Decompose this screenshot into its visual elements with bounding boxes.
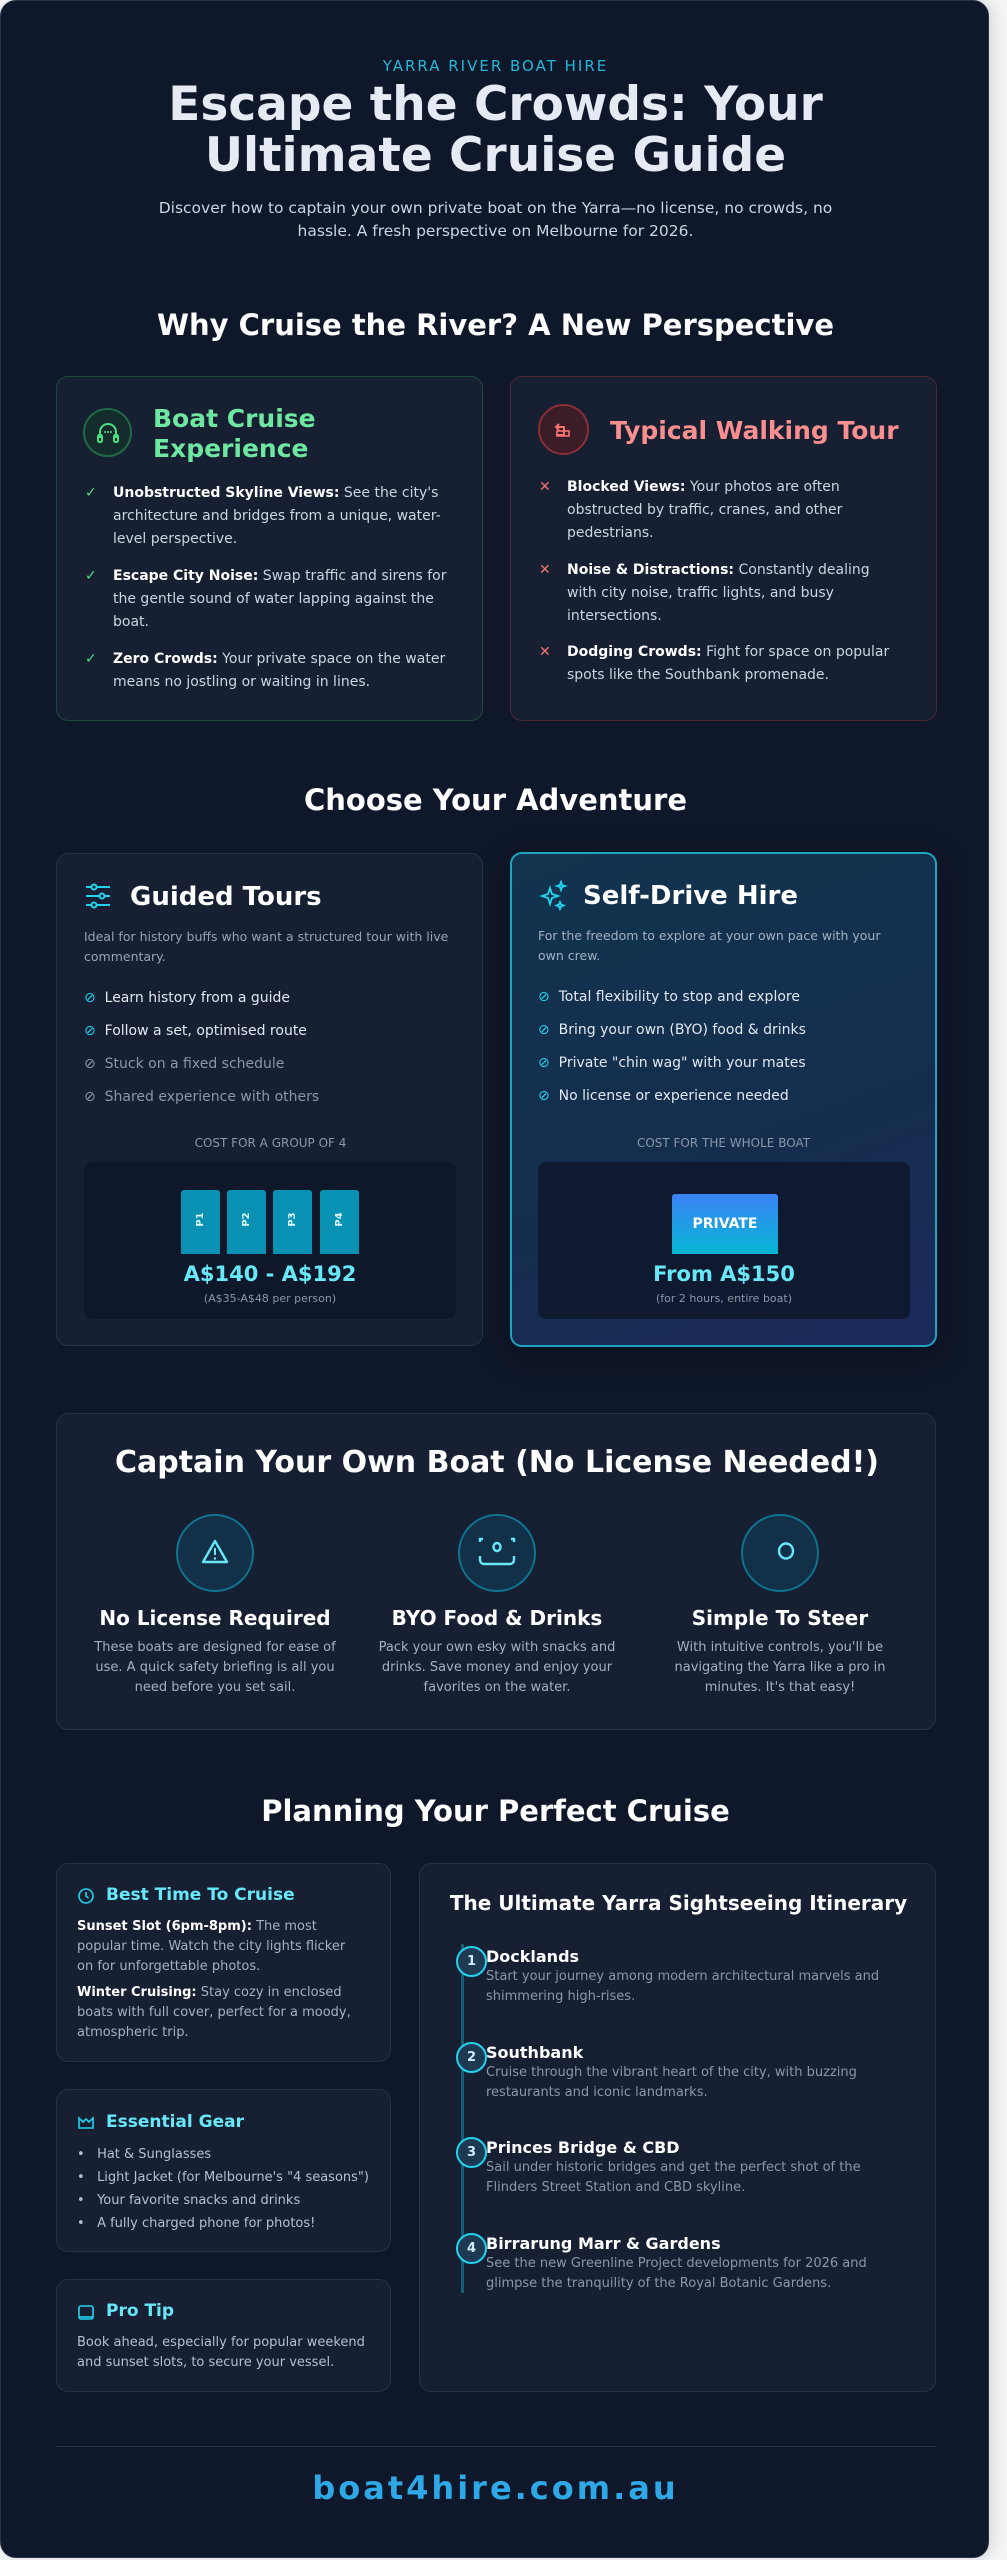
panel: captain your own boat [56, 1413, 936, 1730]
panel: pro tip: Book ahead, especially for popular weekend and sunset slots, to secure your vessel. [77, 2335, 365, 2370]
icon: warning [176, 1514, 254, 1592]
feature: no license [94, 1514, 336, 1695]
list: ✕ [539, 644, 551, 660]
icon: cooler [458, 1514, 536, 1592]
list: Blocked Views: Your photos are often obstructed by traffic, cranes, and other pedestrians. [567, 479, 842, 541]
heading: The Ultimate Yarra Sightseeing Itinerary [450, 1891, 907, 1915]
panel: essential gear [56, 2089, 391, 2252]
stop 4: Birrarung Marr & Gardens [486, 2234, 721, 2253]
people bars [181, 1190, 359, 1254]
features: ⊘ Total flexibility to stop and explore [538, 989, 800, 1005]
icon: sliders [86, 884, 110, 908]
stop 1: Start your journey among modern architectural marvels and shimmering high-rises. [486, 1969, 879, 2004]
heading: Experience [153, 434, 308, 463]
heading: Self-Drive Hire [583, 881, 798, 911]
panel: self-drive hire [510, 852, 937, 1347]
title: Escape the Crowds: Your [168, 77, 823, 132]
stop 2: Southbank [486, 2043, 583, 2062]
list: • Hat & Sunglasses [77, 2147, 211, 2162]
stop 3: Princes Bridge & CBD [486, 2138, 680, 2157]
panel: best time [56, 1863, 391, 2062]
features: ⊘ Follow a set, optimised route [84, 1023, 307, 1039]
private badge: PRIVATE [692, 1216, 758, 1232]
panel: essential gear: Essential Gear [106, 2112, 244, 2132]
stop 2: 2 [467, 2050, 476, 2065]
feature: steer [674, 1514, 885, 1695]
price box [538, 1162, 910, 1319]
panel: pro tip: Pro Tip [106, 2301, 174, 2321]
list: • Your favorite snacks and drinks [77, 2193, 300, 2208]
panel: best time: Best Time To Cruise [106, 1885, 295, 1905]
cost label: COST FOR A GROUP OF 4 [195, 1136, 346, 1150]
feature: BYO: Pack your own esky with snacks and drinks. Save money and enjoy your favorites on the water. [379, 1640, 615, 1695]
icon: clock [78, 1888, 94, 1904]
feature: no license: These boats are designed for ease of use. A quick safety briefing is all you need before you set sail. [94, 1640, 336, 1695]
cost label: COST FOR THE WHOLE BOAT [637, 1136, 810, 1150]
body: Sunset Slot (6pm-8pm): The most popular time. Watch the city lights flicker on for unforgettable photos. [77, 1919, 345, 1974]
description: For the freedom to explore at your own pace with your own crew. [538, 928, 880, 963]
subtitle: Discover how to captain your own private boat on the Yarra—no license, no crowds, no hassle. A fresh perspective on Melbourne for 2026. [159, 199, 832, 240]
list: Dodging Crowds: Fight for space on popular spots like the Southbank promenade. [567, 644, 889, 683]
stop 1 [456, 1946, 879, 2004]
stop 2: Cruise through the vibrant heart of the city, with buzzing restaurants and iconic landmarks. [486, 2065, 857, 2100]
list: ✓ [85, 485, 97, 501]
list: ✓ [85, 651, 97, 667]
list [85, 485, 446, 690]
heading: planning: Planning Your Perfect Cruise [261, 1794, 730, 1828]
list: Unobstructed Skyline Views: See the city's architecture and bridges from a unique, water-level perspective. [113, 485, 441, 547]
list: • Light Jacket (for Melbourne's "4 seasons") [77, 2170, 369, 2185]
price box: (A$35-A$48 per person) [204, 1292, 336, 1305]
features: ⊘ Bring your own (BYO) food & drinks [538, 1022, 806, 1038]
title: Ultimate Cruise Guide [205, 128, 786, 183]
heading: Captain Your Own Boat (No License Needed!) [115, 1445, 879, 1480]
people bars: P4 [334, 1212, 345, 1227]
feature: BYO: BYO Food & Drinks [392, 1606, 602, 1630]
features: ⊘ Shared experience with others [84, 1089, 319, 1105]
icon: walking [538, 404, 589, 455]
stop 4: See the new Greenline Project developments for 2026 and glimpse the tranquility of the Royal Botanic Gardens. [486, 2256, 867, 2291]
heading [153, 404, 316, 463]
stop 3: 3 [467, 2145, 476, 2160]
list: Zero Crowds: Your private space on the water means no jostling or waiting in lines. [113, 651, 445, 690]
feature: steer: With intuitive controls, you'll be navigating the Yarra like a pro in minutes. It's that easy! [674, 1640, 885, 1695]
feature: BYO [379, 1514, 615, 1695]
panel: boat cruise experience [56, 376, 483, 721]
list [77, 2147, 369, 2231]
panel: best time: Winter Cruising: Stay cozy in enclosed boats with full cover, perfect for a moody, atmospheric trip. [77, 1985, 351, 2040]
panel: itinerary [419, 1863, 936, 2392]
list: • A fully charged phone for photos! [77, 2216, 315, 2231]
icon: sparkles [539, 880, 568, 912]
stop 3 [456, 2137, 861, 2195]
list: Noise & Distractions: Constantly dealing with city noise, traffic lights, and busy intersections. [567, 562, 870, 624]
stop 4 [456, 2233, 867, 2291]
people bars: P2 [241, 1212, 252, 1227]
panel: pro tip [56, 2279, 391, 2392]
people bars: P1 [195, 1212, 206, 1227]
stop 1: 1 [467, 1954, 476, 1969]
timeline line [461, 1944, 464, 2293]
feature: steer: Simple To Steer [692, 1606, 868, 1630]
heading: Typical Walking Tour [610, 416, 899, 445]
list [539, 479, 890, 683]
panel: walking tour [510, 376, 937, 721]
eyebrow: YARRA RIVER BOAT HIRE [383, 57, 608, 75]
list: ✕ [539, 479, 551, 495]
list: ✕ [539, 562, 551, 578]
price: From A$150 [653, 1262, 795, 1286]
private badge [672, 1194, 778, 1254]
footer url: boat4hire.com.au [312, 2469, 679, 2507]
feature: no license: No License Required [99, 1606, 331, 1630]
features [84, 990, 319, 1105]
stop 1: Docklands [486, 1947, 579, 1966]
heading: why cruise: Why Cruise the River? A New Perspective [157, 308, 834, 342]
panel: guided tours [56, 853, 483, 1346]
price box [84, 1162, 456, 1319]
features: ⊘ Stuck on a fixed schedule [84, 1056, 284, 1072]
heading: choose adventure: Choose Your Adventure [304, 783, 687, 817]
heading: Guided Tours [130, 882, 322, 912]
icon: bag [78, 2116, 94, 2129]
heading: Boat Cruise [153, 404, 316, 433]
description: Ideal for history buffs who want a structured tour with live commentary. [84, 929, 448, 964]
list: Escape City Noise: Swap traffic and sirens for the gentle sound of water lapping against the boat. [113, 568, 446, 630]
stop 3: Sail under historic bridges and get the perfect shot of the Flinders Street Station and CBD skyline. [486, 2160, 861, 2195]
icon: headphones [83, 408, 132, 457]
price box: (for 2 hours, entire boat) [656, 1292, 792, 1305]
title [168, 77, 823, 183]
features: ⊘ Learn history from a guide [84, 990, 290, 1006]
list: ✓ [85, 568, 97, 584]
price: A$140 - A$192 [184, 1262, 356, 1286]
features [538, 989, 806, 1104]
features: ⊘ No license or experience needed [538, 1088, 789, 1104]
people bars: P3 [287, 1212, 298, 1227]
icon: calendar [78, 2305, 94, 2320]
stop 2 [456, 2042, 857, 2100]
icon: wheel [741, 1514, 819, 1592]
stop 4: 4 [467, 2241, 476, 2256]
features: ⊘ Private "chin wag" with your mates [538, 1055, 806, 1071]
